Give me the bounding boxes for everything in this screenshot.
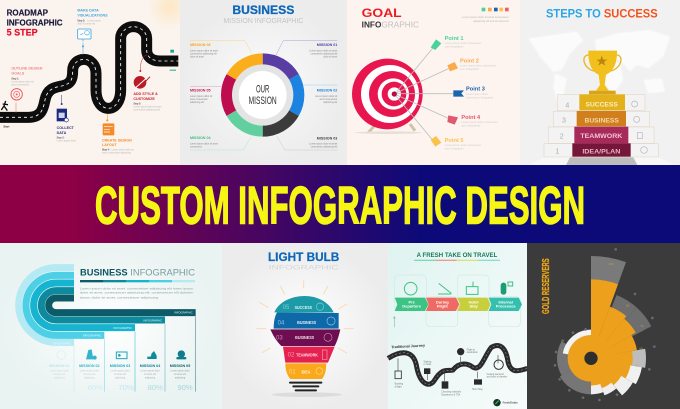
mission 05: Lorem ipsum dolor sit: [190, 95, 213, 98]
step teamwork: [574, 127, 628, 143]
bulb segment idea: [285, 363, 326, 379]
mission 05 column: sit amet elit: [174, 373, 186, 376]
step 5 add style and customize: ADD STYLE &: [133, 92, 158, 96]
step business: BUSINESS: [584, 117, 619, 124]
mission 03: Lorem ipsum dolor sit amet: [309, 142, 338, 145]
concentric bands: [19, 268, 196, 342]
chart value labels: 70: [640, 324, 644, 328]
mission 04 column: Lorem ipsum dolor: [140, 370, 160, 373]
mission 06: dolor sit amet: [190, 55, 204, 58]
target: [352, 59, 423, 134]
journey captions: Flight to: [467, 348, 476, 351]
mission 02 column: Lorem ipsum dolor: [80, 370, 99, 373]
business text: [80, 287, 194, 299]
mission 02 column: 60%: [88, 383, 103, 392]
chevron internal processes: Internal: [498, 299, 513, 304]
arrow point 4: Point 4: [461, 115, 481, 121]
mission 03 column: sit amet elit: [114, 373, 126, 376]
step 2 collect data: COLLECT: [57, 126, 75, 130]
arrow point 4: Lorem ipsum dolor consectetur: [461, 120, 498, 124]
step teamwork: TEAMWORK: [580, 133, 623, 140]
logo: [493, 399, 518, 406]
bulb segment business 03: BUSINESS: [295, 335, 315, 341]
step 3 make data visualizations: MAKE DATA: [77, 9, 99, 13]
step numbers: 3: [562, 117, 566, 124]
bulb title: LIGHT BULB: [268, 251, 339, 264]
mission 06: [190, 43, 218, 58]
journey captions: Departures & TSA: [441, 393, 461, 396]
mission 04 column: adipiscing: [145, 377, 156, 379]
panel: goal infographic: [347, 0, 520, 165]
side steps: [544, 95, 658, 157]
step numbers: 4: [565, 102, 569, 109]
steps background: [520, 0, 680, 165]
donut: mission segments: [221, 53, 304, 137]
goal title: GOAL: [362, 6, 402, 20]
mission 02: adipiscing elit: [323, 101, 338, 104]
step 2 collect data: [57, 95, 76, 142]
mission 02 column: sit amet elit: [83, 373, 96, 376]
polar chart: [547, 256, 654, 397]
journey stops: [395, 348, 503, 389]
mission 03: consectetur adipiscing elit: [311, 145, 338, 148]
bulb segment idea: 01: [289, 370, 296, 376]
chart value labels: 50: [635, 364, 639, 368]
target stand: [368, 124, 415, 133]
panel: gold reservers: [527, 243, 680, 409]
band labels: INFOGRAPHIC: [144, 318, 162, 322]
journey captions: and hotel in transfer: [487, 376, 507, 379]
gold wedges: [568, 279, 639, 390]
step 3 make data visualizations: Step 3:: [77, 19, 85, 22]
mission 05 column: 90%: [177, 383, 193, 392]
center label: [249, 84, 277, 107]
roadmap title: ROADMAP: [7, 9, 49, 18]
journey captions: Waiting: [424, 360, 432, 363]
mission 04 column: sit amet elit: [144, 373, 156, 376]
step 3 make data visualizations: [77, 9, 108, 55]
arrow point 2: your infographic: [460, 67, 480, 71]
arrow point 1: [397, 36, 481, 92]
mission subtitle: MISSION INFOGRAPHIC: [223, 18, 303, 25]
bulb segment business 03: [270, 329, 340, 346]
bulb segment success: SUCCESS: [295, 305, 312, 311]
card icons: [404, 282, 513, 295]
bulb segment idea: IDEA: [301, 369, 311, 375]
arrow point 5: your infographic: [445, 146, 464, 150]
chevron during flight: Flight: [437, 304, 448, 309]
step success: SUCCESS: [585, 101, 618, 108]
mission 03: [309, 136, 338, 148]
finish flag: [170, 50, 176, 71]
title rule: [80, 280, 195, 282]
mission 04: consectetur: [190, 145, 202, 148]
band labels: INFOGRAPHIC: [83, 334, 101, 338]
journey label: Traditional Journey: [391, 344, 426, 349]
business title: BUSINESS INFOGRAPHIC: [80, 267, 196, 277]
goal description: Lorem ipsum dolor sit amet consectetur: [462, 15, 509, 19]
business background: [0, 243, 222, 409]
goal background: [347, 0, 520, 165]
mission 01: consectetur adipiscing elit: [311, 52, 338, 55]
step 2 collect data: Lorem ipsum dolor: [57, 139, 76, 142]
mission 05: adipiscing elit: [190, 101, 204, 104]
floor: [528, 157, 675, 165]
cards: [395, 275, 520, 327]
title rule: [414, 260, 500, 261]
color swatches: [482, 8, 509, 11]
bulb segment success: 05: [283, 305, 290, 311]
mission 02 column: MISSION 02: [79, 364, 100, 368]
journey captions: [395, 348, 507, 396]
bulb base: [272, 382, 342, 397]
corner glow: [147, 0, 193, 30]
mission 01: Lorem ipsum dolor sit amet: [309, 49, 338, 52]
logo: FreshGrubs: [503, 401, 518, 405]
mission 03 column: [110, 352, 134, 392]
banner background: [0, 165, 680, 244]
step 1 outline: [11, 67, 43, 113]
mission background: [180, 0, 347, 165]
mission 06: MISSION 06: [190, 43, 211, 47]
mission 03: MISSION 03: [317, 136, 337, 140]
step 3 make data visualizations: VISUALIZATIONS: [77, 14, 108, 18]
arrow point 5: [396, 96, 481, 150]
chevron pre departure: Departure: [402, 304, 422, 309]
travel background: [388, 243, 527, 409]
arrow point 3: Point 3: [466, 87, 485, 93]
step idea plan: [572, 143, 631, 157]
chevron internal processes: Processes: [496, 304, 516, 309]
mission 04: [190, 136, 218, 148]
panel: business mission infographic: [180, 0, 347, 165]
mission 04: Lorem ipsum dolor sit amet: [190, 142, 218, 145]
journey captions: a flight: [395, 385, 402, 388]
step 4 create design layout: CREATE DESIGN: [102, 138, 132, 142]
step 4 create design layout: Lorem ipsum dolor sit: [111, 149, 134, 152]
center label: OUR: [256, 84, 269, 96]
arrow point 5: Lorem ipsum dolor consectetur: [445, 143, 481, 147]
chart value labels: [609, 262, 644, 368]
chart value labels: 60: [639, 347, 643, 351]
arrow point 4: [397, 95, 498, 127]
chart value labels: 80: [626, 304, 630, 308]
mission 04 column: [140, 351, 163, 392]
chevron during flight: [426, 298, 459, 311]
step 4 create design layout: Step 4:: [102, 149, 110, 152]
band labels: [53, 311, 193, 346]
bulb segment success: [274, 296, 334, 312]
arrow point 2: Point 2: [460, 59, 479, 65]
mission 01: [309, 43, 338, 58]
chevron hotel stay: Stay: [469, 304, 479, 309]
journey captions: in hotel: [424, 363, 432, 366]
step 5 add style and customize: consectetur adipiscing elit: [133, 108, 160, 111]
mission 06: Lorem ipsum dolor sit amet: [190, 49, 218, 52]
mission 05: amet consectetur: [190, 98, 208, 101]
gold title: GOLD RESERVERS: [541, 258, 552, 314]
mission 03 column: MISSION 03: [110, 364, 130, 368]
mission 04: MISSION 04: [190, 136, 211, 140]
panel: business infographic: [0, 243, 222, 409]
mission 05 column: [170, 350, 193, 392]
step 4 create design layout: LAYOUT: [102, 143, 117, 147]
step 4 create design layout: [102, 114, 134, 155]
roadmap background: [0, 0, 180, 165]
mission 02 column: adipiscing: [84, 377, 95, 379]
mission 05 column: MISSION 05: [170, 364, 190, 368]
mission 01 column: adipiscing: [54, 377, 65, 379]
arrow point 1: your infographic: [445, 44, 464, 48]
step 4 create design layout: amet consectetur adipiscing: [102, 152, 132, 155]
arrow point 5: Point 5: [445, 138, 464, 144]
step 2 collect data: DATA: [57, 131, 67, 135]
bulb segment business 04: BUSINESS: [297, 320, 317, 326]
mission 03 column: 70%: [118, 383, 134, 392]
step 5 add style and customize: Lorem ipsum dolor sit amet: [133, 105, 162, 108]
arrow point 2: Lorem ipsum dolor consectetur: [460, 64, 497, 68]
step 2 collect data: Step 2:: [57, 136, 65, 139]
mission 02: MISSION 02: [317, 89, 337, 93]
panel: light bulb: [222, 243, 388, 409]
bulb subtitle: INFOGRAPHIC: [269, 265, 339, 272]
chart hub: [584, 352, 598, 365]
chevron pre departure: Pre: [408, 299, 416, 304]
goal description: adipiscing elit sed do eiusmod: [473, 19, 509, 23]
connector lines: [190, 41, 337, 150]
band labels: INFOGRAPHIC: [174, 311, 193, 315]
goal subtitle: INFOGRAPHIC: [362, 21, 419, 30]
bulb background: [222, 243, 388, 409]
mission 04 column: 80%: [148, 383, 163, 392]
panel: a fresh take on travel: [388, 243, 527, 409]
arrow point 3: [397, 87, 494, 99]
journey captions: Getting transport: [487, 373, 504, 376]
chevron internal processes: [489, 298, 522, 311]
mission 01: dolor sit amet: [323, 55, 338, 58]
road: [0, 27, 178, 117]
mission 01 column: Lorem ipsum dolor: [50, 370, 69, 373]
step numbers: 2: [560, 134, 564, 141]
arrow point 1: Lorem ipsum dolor consectetur: [445, 41, 481, 45]
step 3 make data visualizations: dolor sit amet elit: [77, 23, 95, 26]
step numbers: 1: [555, 148, 559, 155]
journey road: [388, 346, 527, 384]
arrow point 2: [397, 59, 497, 93]
mission 01: MISSION 01: [317, 43, 337, 47]
step 1 outline: Lorem ipsum dolor sit: [11, 80, 34, 83]
trophy: [584, 51, 621, 94]
arrow point 4: your infographic: [461, 123, 481, 127]
arrow point 3: Lorem ipsum dolor: [466, 92, 488, 96]
chevron hotel stay: Hotel: [469, 299, 479, 304]
arrow point 1: Point 1: [445, 36, 464, 42]
mission 02: Lorem ipsum dolor sit: [315, 95, 338, 98]
mission 03 column: Lorem ipsum dolor: [110, 370, 130, 373]
mission 02: amet consectetur: [319, 98, 338, 101]
steps title: STEPS TO SUCCESS: [546, 7, 658, 20]
world map: [528, 30, 670, 100]
step 1 outline: amet consectetur: [11, 83, 29, 86]
journey captions: Checking schedule: [441, 392, 462, 394]
mission 01 column: [49, 351, 73, 392]
roadmap 5 step: 5 STEP: [7, 28, 38, 38]
step 3 make data visualizations: Lorem ipsum: [87, 19, 101, 22]
bulb segment business 03: 03: [276, 335, 283, 341]
chevron during flight: During: [436, 299, 449, 304]
mission 02 column: [79, 349, 103, 392]
runner: [1, 101, 8, 111]
business text: dolor sit amet, consectetuer adipiscing elit, consectetuer elit dolorem: [80, 291, 194, 295]
band labels: INFOGRAPHIC: [114, 326, 132, 330]
chart outside dots: [554, 248, 656, 401]
chevron hotel stay: [457, 298, 491, 311]
start label: Start: [3, 125, 10, 129]
goal description: [462, 15, 509, 23]
banner: [0, 165, 680, 244]
travel title: A FRESH TAKE ON TRAVEL: [417, 253, 498, 259]
chevron pre departure: [395, 298, 428, 311]
roadmap subtitle: INFOGRAPHIC: [7, 18, 63, 27]
step 5 add style and customize: Step 5:: [133, 102, 141, 105]
mission 01 column: MISSION 01: [49, 364, 70, 368]
mission 05 column: adipiscing: [175, 377, 186, 379]
mission 05 column: Lorem ipsum dolor: [170, 370, 190, 373]
bulb segment teamwork: [283, 347, 335, 363]
journey captions: Hotel Stay: [472, 388, 484, 391]
bulb segment business 04: [274, 312, 339, 329]
center label: MISSION: [249, 95, 277, 107]
outer wedges: [547, 256, 654, 397]
gold background: [527, 243, 680, 409]
bulb segment teamwork: TEAMWORK: [296, 353, 318, 359]
mission 01 column: 50%: [57, 383, 73, 392]
business text: Lorem ipsum dolor sit amet, consectetuer adipiscing elit lorem ipsum: [80, 287, 194, 291]
mission 06: consectetur adipiscing elit: [190, 52, 217, 55]
step 1 outline: OUTLINE DESIGN: [11, 67, 43, 71]
step 5 add style and customize: CUSTOMIZE: [133, 97, 155, 101]
mission 05: [190, 89, 213, 104]
step business: [577, 111, 626, 126]
chart value labels: 200: [609, 262, 614, 266]
column dividers: [74, 316, 196, 392]
arrow point 3: consectetur infographic: [466, 95, 494, 99]
side arrow: [393, 316, 395, 327]
panel: roadmap infographic: [0, 0, 193, 165]
mission 01 column: sit amet elit: [53, 373, 66, 376]
panel: steps to success: [520, 0, 680, 165]
step 5 add style and customize: [133, 55, 162, 111]
journey captions: destination: [467, 351, 479, 354]
step numbers: [555, 102, 569, 155]
mission 05: MISSION 05: [190, 89, 211, 93]
mission 03 column: adipiscing: [115, 377, 126, 379]
mission 02: [315, 89, 338, 104]
step 1 outline: GOALS: [11, 71, 25, 75]
light rays: [256, 280, 354, 353]
mission 04 column: MISSION 04: [140, 364, 161, 368]
band labels: INFOGRAPHIC: [53, 342, 71, 346]
journey captions: Booking: [395, 384, 404, 386]
business text: ipsum dolor sit amet, consectetuer adipiscing: [80, 295, 159, 299]
step idea plan: IDEA/PLAN: [582, 148, 621, 155]
step icons: [632, 101, 647, 153]
bulb segment business 04: 04: [278, 320, 285, 326]
mission title: BUSINESS: [232, 3, 294, 17]
step 1 outline: Step 1:: [11, 77, 19, 80]
bulb segment teamwork: 02: [288, 353, 295, 359]
step success: [579, 94, 625, 110]
